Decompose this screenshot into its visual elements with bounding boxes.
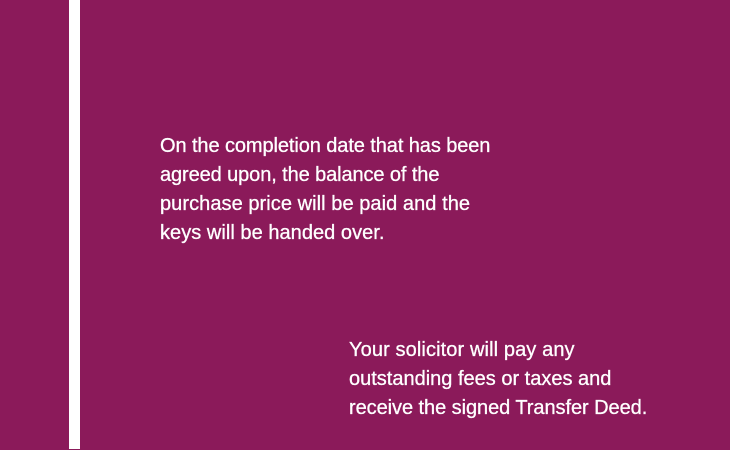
text block: solicitor: receive the signed Transfer Deed. [349, 397, 647, 419]
text block: completion date: keys will be handed over. [160, 222, 384, 244]
text block: solicitor: outstanding fees or taxes and [349, 368, 611, 390]
text block: completion date [160, 135, 490, 244]
text block: completion date: purchase price will be paid and the [160, 193, 470, 215]
text block: completion date: On the completion date that has been [160, 135, 490, 157]
text block: solicitor: Your solicitor will pay any [349, 339, 575, 361]
text block: completion date: agreed upon, the balance of the [160, 164, 439, 186]
text block: solicitor [349, 339, 647, 419]
vertical white bar [69, 0, 80, 449]
